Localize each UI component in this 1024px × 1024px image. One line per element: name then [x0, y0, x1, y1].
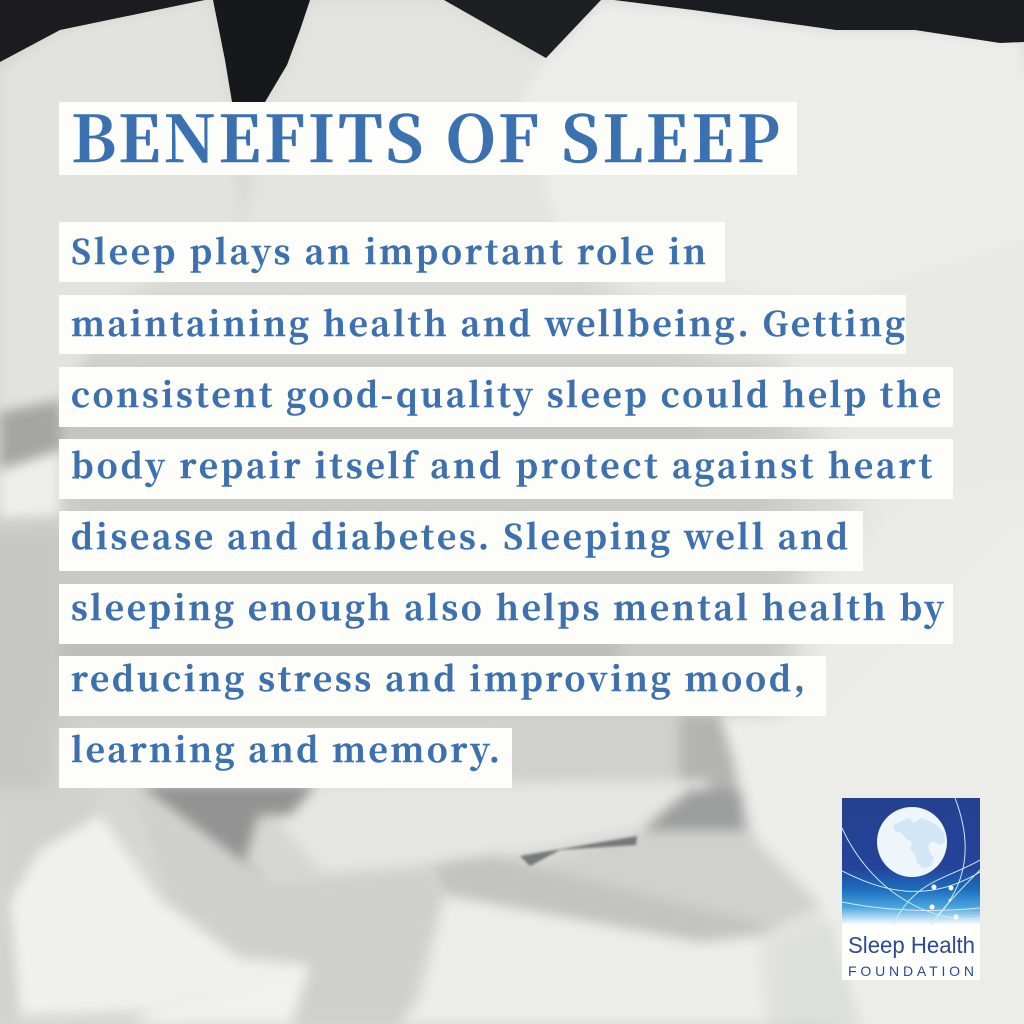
title banner: BENEFITS OF SLEEP	[71, 89, 780, 181]
central right fold	[540, 830, 820, 935]
upper sheet	[265, 780, 710, 872]
gaps between bars	[60, 420, 700, 445]
body text block	[59, 222, 953, 788]
text line 7: reducing stress and improving mood,	[71, 652, 805, 701]
left side shadow	[0, 400, 60, 475]
text line 8: learning and memory.	[71, 723, 500, 772]
dark headboard centre	[444, 0, 601, 58]
central gray	[130, 790, 440, 1024]
icon: orbit lines and dots	[842, 798, 980, 925]
left pillow	[0, 0, 240, 420]
logo subtitle: FOUNDATION	[848, 963, 974, 979]
lower white sheet	[400, 895, 765, 1024]
text line 1: Sleep plays an important role in	[71, 225, 706, 274]
icon: moon	[877, 807, 947, 877]
text line 5: disease and diabetes. Sleeping well and	[71, 510, 848, 559]
logo: Sleep Health Foundation	[842, 798, 980, 980]
crease	[520, 836, 637, 866]
dark headboard right	[614, 0, 1024, 43]
dark fold top	[140, 785, 316, 882]
text line 6: sleeping enough also helps mental health by	[71, 581, 944, 630]
dark headboard left	[0, 0, 205, 62]
text line 2: maintaining health and wellbeing. Getting	[71, 297, 905, 346]
left gray	[0, 790, 105, 1024]
right duvet fold	[720, 520, 1024, 1024]
text line 4: body repair itself and protect against heart	[71, 439, 933, 488]
logo wordmark: Sleep Health	[848, 932, 975, 958]
right pillow	[520, 0, 1024, 300]
white left sheet	[10, 815, 310, 1015]
middle pillow	[240, 0, 570, 240]
text line 3: consistent good-quality sleep could help the	[71, 368, 941, 417]
dark headboard centre-left	[213, 0, 310, 102]
